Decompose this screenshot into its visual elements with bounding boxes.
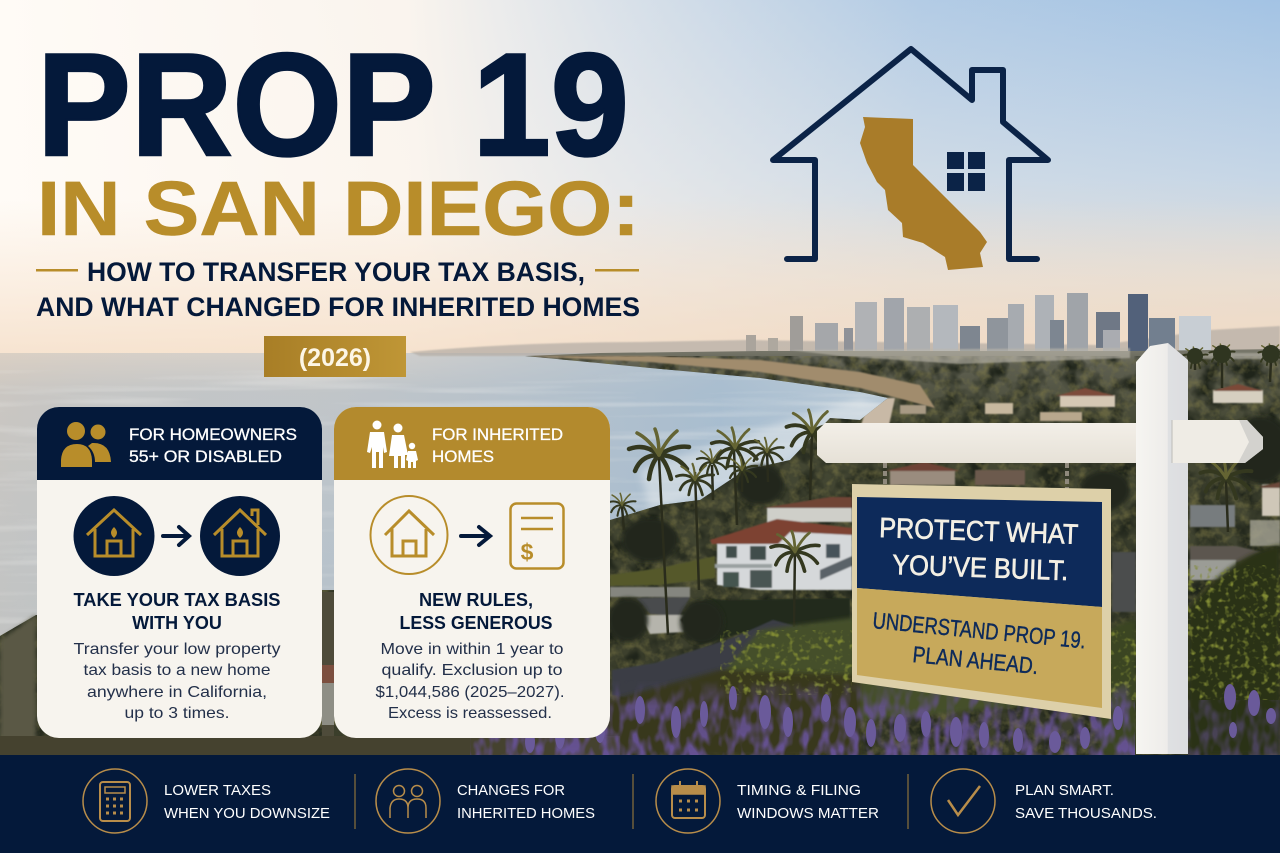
sign tagline <box>872 607 1087 679</box>
icon: calendar <box>656 769 720 833</box>
footer item: inherited homes: CHANGES FOR <box>457 782 565 799</box>
year badge <box>264 336 406 377</box>
footer item: timing <box>656 769 879 833</box>
background: foreground shrubs <box>0 545 1280 755</box>
subtitle: HOW TO TRANSFER YOUR TAX BASIS, <box>87 257 585 287</box>
card body text: Move in within 1 year to <box>380 641 564 658</box>
window <box>947 152 985 191</box>
card heading: TAKE YOUR TAX BASIS <box>74 590 280 610</box>
background: distant hills <box>410 326 1280 356</box>
header label: HOMES <box>432 448 494 466</box>
footer bar <box>0 755 1280 853</box>
icon: family <box>367 420 418 468</box>
sign headline: PROTECT WHAT <box>879 512 1079 550</box>
icon: house to house transfer <box>74 496 280 576</box>
sign headline <box>879 512 1079 586</box>
real estate sign post <box>817 343 1263 754</box>
white villa <box>717 522 852 590</box>
California shape <box>860 117 987 270</box>
card body text: $1,044,586 (2025–2027). <box>376 684 564 701</box>
icon: people <box>61 422 111 467</box>
panel: inherited homes <box>334 407 610 738</box>
icon: house with California logo <box>773 49 1048 270</box>
panel header <box>37 407 322 480</box>
header label: FOR HOMEOWNERS <box>129 426 297 444</box>
right-hand houses <box>1190 546 1262 562</box>
background: dark trees <box>608 416 1280 644</box>
icon: two people <box>376 769 440 833</box>
card body text: tax basis to a new home <box>84 662 271 679</box>
sandstone cliffs <box>525 356 935 408</box>
footer item: lower taxes: WHEN YOU DOWNSIZE <box>164 805 330 822</box>
footer item: inherited homes <box>376 769 595 833</box>
footer item: lower taxes: LOWER TAXES <box>164 782 271 799</box>
subtitle: AND WHAT CHANGED FOR INHERITED HOMES <box>36 292 640 322</box>
background: palm trees <box>608 344 1280 635</box>
panel: homeowners <box>37 407 322 738</box>
card body text: up to 3 times. <box>124 705 230 722</box>
dark tile roofs <box>612 620 810 700</box>
footer item: plan smart: PLAN SMART. <box>1015 782 1114 799</box>
icon: house to tax bill <box>370 496 564 574</box>
upper villa <box>763 497 852 508</box>
card body text: qualify. Exclusion up to <box>382 662 563 679</box>
header label: FOR INHERITED <box>432 426 563 444</box>
title: PROP 19: PROP 19 <box>37 23 629 186</box>
background: lavender flowers <box>470 680 1280 755</box>
panel header <box>334 407 610 480</box>
background: sky <box>0 0 1280 354</box>
background: town details <box>610 348 1280 700</box>
sign tagline: UNDERSTAND PROP 19. <box>872 607 1087 653</box>
footer item: plan smart <box>931 769 1157 833</box>
card heading: WITH YOU <box>132 613 222 633</box>
sign headline: YOU’VE BUILT. <box>892 549 1069 586</box>
hanging sign <box>852 463 1111 719</box>
card body text: Transfer your low property <box>74 641 280 658</box>
year badge: (2026) <box>299 344 371 372</box>
footer item: timing: WINDOWS MATTER <box>737 805 879 822</box>
sign tagline: PLAN AHEAD. <box>912 641 1039 679</box>
card heading: LESS GENEROUS <box>400 613 552 633</box>
background: coastal land <box>0 345 1280 755</box>
hedge and road <box>610 556 715 586</box>
card body text: anywhere in California, <box>87 684 267 701</box>
icon: checkmark <box>931 769 995 833</box>
card heading: NEW RULES, <box>419 590 533 610</box>
footer item: timing: TIMING & FILING <box>737 782 861 799</box>
background: ocean <box>0 353 888 636</box>
card body text: Excess is reassessed. <box>388 705 552 722</box>
footer item: lower taxes <box>83 769 330 833</box>
subtitle <box>36 257 640 322</box>
icon: calculator <box>83 769 147 833</box>
icon: house to tax bill: $ <box>521 539 534 565</box>
background: downtown skyline <box>746 293 1211 356</box>
title: IN SAN DIEGO: IN SAN DIEGO: <box>37 166 640 252</box>
header label: 55+ OR DISABLED <box>129 448 282 466</box>
footer item: inherited homes: INHERITED HOMES <box>457 805 595 822</box>
footer item: plan smart: SAVE THOUSANDS. <box>1015 805 1157 822</box>
